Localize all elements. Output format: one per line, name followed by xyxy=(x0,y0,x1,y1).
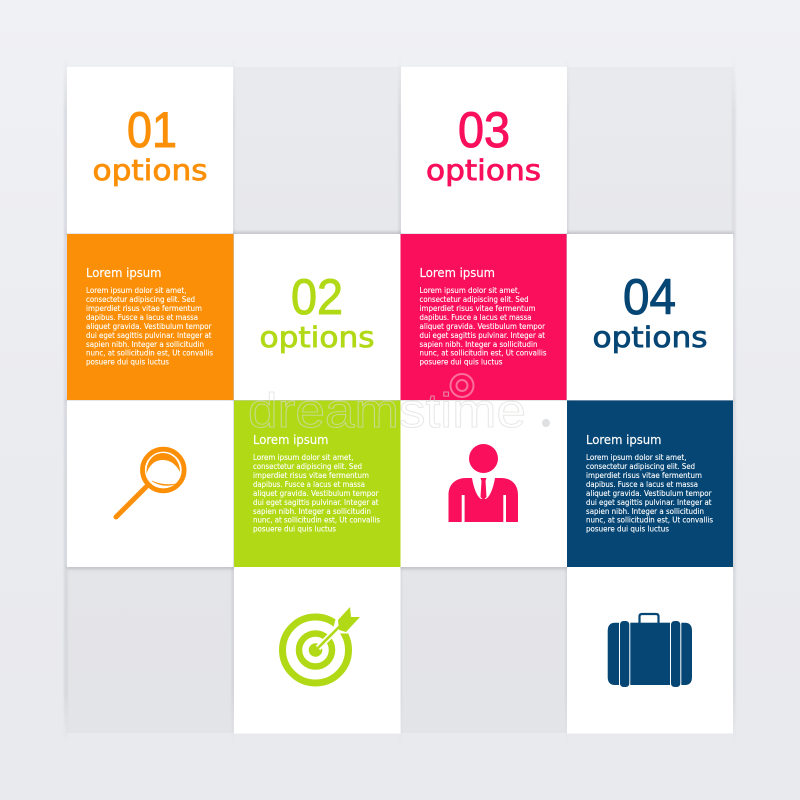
body text: consectetur adipiscing elit. Sed xyxy=(586,461,695,471)
label options: options xyxy=(92,154,208,187)
body text: sapien nibh. Integer a sollicitudin xyxy=(420,339,538,349)
body text: dui eget sagittis pulvinar. Integer at xyxy=(420,330,546,340)
number 03: 03 xyxy=(458,102,510,158)
body text xyxy=(86,285,213,366)
heading: Lorem ipsum xyxy=(420,266,495,280)
body text: consectetur adipiscing elit. Sed xyxy=(86,294,195,304)
panel: target icon cell xyxy=(234,567,400,734)
panel: 01 text block xyxy=(67,234,234,400)
body text: aliquet gravida. Vestibulum tempor xyxy=(586,488,712,498)
panel: 03 text block xyxy=(400,234,566,400)
body text: dapibus. Fusce a lacus et massa xyxy=(586,479,698,489)
panel: 04 text block xyxy=(567,400,733,567)
panel: 02 options xyxy=(234,234,400,400)
icon: magnifying glass xyxy=(116,449,184,517)
label options: options xyxy=(260,321,374,354)
panel: magnifier icon cell xyxy=(67,400,234,567)
icon: briefcase xyxy=(608,614,692,687)
body text: posuere dui quis luctus xyxy=(586,524,669,534)
body text: nunc, at sollicitudin est, Ut convallis xyxy=(420,348,546,358)
panel: person icon cell xyxy=(400,400,567,567)
body text: Lorem ipsum dolor sit amet, xyxy=(586,452,686,462)
gray cells xyxy=(67,67,733,733)
label options: options xyxy=(592,321,708,354)
panel: 01 options xyxy=(67,67,233,234)
watermark dot xyxy=(542,419,550,427)
icon: businessman xyxy=(448,444,518,522)
heading: Lorem ipsum xyxy=(86,266,162,280)
panel: briefcase icon cell xyxy=(567,567,733,734)
panel: 03 options xyxy=(401,67,567,234)
body text: dui eget sagittis pulvinar. Integer at xyxy=(586,497,712,507)
body text: sapien nibh. Integer a sollicitudin xyxy=(586,506,704,516)
body text xyxy=(420,285,546,366)
fold shadows xyxy=(64,55,735,745)
body text: Lorem ipsum dolor sit amet, xyxy=(86,285,186,295)
body text: aliquet gravida. Vestibulum tempor xyxy=(86,321,212,331)
body text: Lorem ipsum dolor sit amet, xyxy=(253,452,354,462)
number 04: 04 xyxy=(623,269,676,325)
body text: dui eget sagittis pulvinar. Integer at xyxy=(86,330,212,340)
body text: nunc, at sollicitudin est, Ut convallis xyxy=(253,514,380,524)
body text: Lorem ipsum dolor sit amet, xyxy=(420,285,520,295)
heading: Lorem ipsum xyxy=(253,433,328,447)
body text: aliquet gravida. Vestibulum tempor xyxy=(253,488,379,498)
body text: posuere dui quis luctus xyxy=(253,524,336,534)
body text xyxy=(253,452,380,534)
number 02: 02 xyxy=(291,269,343,325)
body text xyxy=(586,452,713,534)
label options: options xyxy=(426,154,541,187)
body text: sapien nibh. Integer a sollicitudin xyxy=(86,339,204,349)
body text: imperdiet risus vitae fermentum xyxy=(253,470,369,480)
body text: aliquet gravida. Vestibulum tempor xyxy=(420,321,546,331)
body text: imperdiet risus vitae fermentum xyxy=(86,303,202,313)
body text: posuere dui quis luctus xyxy=(420,356,502,366)
body text: posuere dui quis luctus xyxy=(86,356,169,366)
body text: dapibus. Fusce a lacus et massa xyxy=(86,312,198,322)
panel: 02 text block xyxy=(234,400,400,567)
body text: consectetur adipiscing elit. Sed xyxy=(253,461,362,471)
body text: nunc, at sollicitudin est, Ut convallis xyxy=(86,348,213,358)
body text: dapibus. Fusce a lacus et massa xyxy=(253,479,365,489)
number 01: 01 xyxy=(127,102,177,158)
body text: imperdiet risus vitae fermentum xyxy=(586,470,702,480)
body text: dui eget sagittis pulvinar. Integer at xyxy=(253,497,379,507)
watermark: dreamstime xyxy=(248,385,526,438)
spiral mark xyxy=(450,374,474,397)
watermark xyxy=(248,374,550,438)
icon: target with arrow xyxy=(282,606,362,683)
heading: Lorem ipsum xyxy=(586,433,662,447)
body text: nunc, at sollicitudin est, Ut convallis xyxy=(586,514,713,524)
body text: sapien nibh. Integer a sollicitudin xyxy=(253,506,371,516)
body text: imperdiet risus vitae fermentum xyxy=(420,303,536,313)
body text: consectetur adipiscing elit. Sed xyxy=(420,294,528,304)
panel: 04 options xyxy=(567,234,733,400)
body text: dapibus. Fusce a lacus et massa xyxy=(420,312,532,322)
cell shadows xyxy=(67,232,733,569)
